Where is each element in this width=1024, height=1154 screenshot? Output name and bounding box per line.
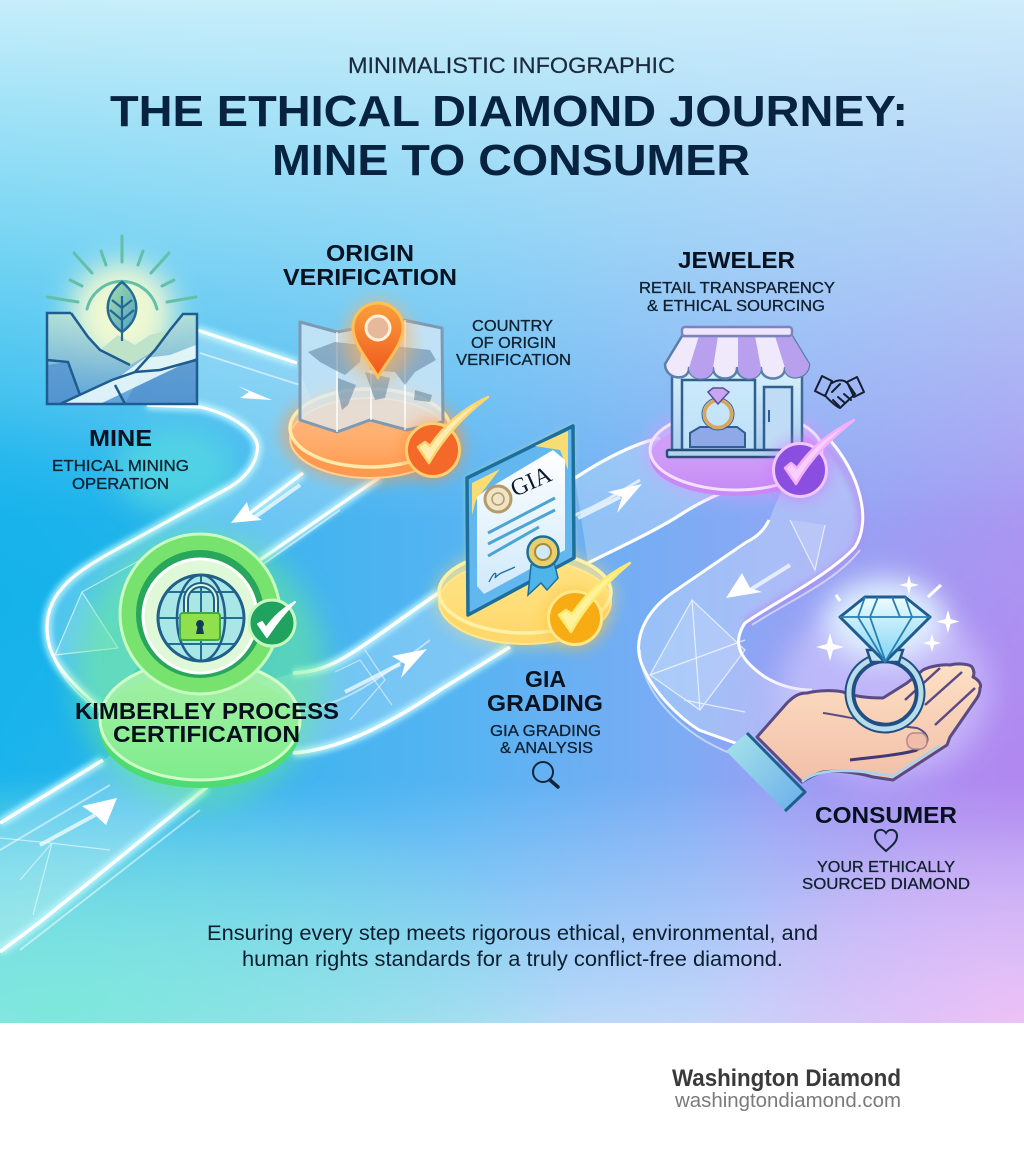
shop building [665,327,809,457]
purple check badge [770,420,854,500]
label: GIA grading [487,666,603,757]
ribbon: GIA to jeweler [575,438,745,563]
station: jeweler storefront [644,327,864,500]
main title: MINE TO CONSUMER [272,136,750,185]
label: GIA grading: GIA [525,666,566,692]
label: consumer: SOURCED DIAMOND [802,876,970,893]
ribbon: mine to origin to Kimberley [47,330,380,720]
label: jeweler [639,247,835,315]
certificate [467,426,574,615]
station: Kimberley Process badge [75,534,325,805]
diamond [840,597,930,662]
label: mine [52,425,189,493]
green check badge [249,600,295,646]
label: consumer [802,802,970,893]
translucent journey ribbon [0,330,863,952]
green glow [75,535,325,805]
label: kimberley process certification: KIMBERLEY PROCESS [75,698,339,724]
station: origin verification map [282,300,488,482]
consumer: hand holding diamond ring [726,575,990,811]
icon: mine landscape with leaf and sun [47,236,197,404]
awning [665,336,809,378]
ring in window [704,400,732,428]
main title: THE ETHICAL DIAMOND JOURNEY: [110,87,908,136]
certificate text: GIA [507,461,556,502]
direction arrows [40,386,790,845]
label: mine: MINE [89,425,152,451]
label: origin verification [283,240,571,369]
label: kimberley process certification: CERTIFICATION [113,721,300,747]
green disk [100,660,300,788]
label: consumer: CONSUMER [815,802,957,828]
closing statement: human rights standards for a truly conflict-free diamond. [242,948,783,971]
label: origin verification: COUNTRY [472,318,553,335]
icon: handshake [815,376,864,408]
label: GIA grading: GIA GRADING [490,723,601,740]
label: origin verification: VERIFICATION [283,264,457,290]
yellow check badge [545,563,630,648]
label: GIA grading: GRADING [487,690,603,716]
ribbon seal [528,558,558,595]
closing statement: Ensuring every step meets rigorous ethical, environmental, and [207,922,818,945]
orange disk [282,386,458,482]
closing statement [207,922,818,971]
footer brand [672,1065,901,1112]
map pin [344,300,412,380]
label: mine: ETHICAL MINING [52,458,189,475]
mountains [47,313,196,404]
footer band [0,1023,1024,1154]
ribbon: start to Kimberley to GIA [0,592,510,952]
leaf [108,282,136,332]
globe with padlock [158,575,244,662]
label: origin verification: VERIFICATION [456,352,571,369]
folded map [300,320,443,432]
label: jeweler: & ETHICAL SOURCING [647,298,825,315]
label: GIA grading: & ANALYSIS [500,740,593,757]
station: GIA grading certificate [435,426,630,648]
label: origin verification: OF ORIGIN [471,335,556,352]
ribbon: jeweler to consumer [639,440,863,773]
footer brand: Washington Diamond [672,1065,901,1092]
ring [849,657,921,729]
shirt cuff [726,733,805,811]
hand [757,664,981,782]
yellow disk [435,547,615,647]
icon: magnifying glass [533,762,558,787]
overline: MINIMALISTIC INFOGRAPHIC [348,53,675,78]
icon: heart [875,830,897,851]
label: origin verification: ORIGIN [326,240,414,266]
label: jeweler: JEWELER [678,247,795,273]
title block [110,53,908,185]
label: kimberley process certification [75,698,339,747]
label: jeweler: RETAIL TRANSPARENCY [639,280,835,297]
label: consumer: YOUR ETHICALLY [817,859,955,876]
purple disk [644,406,828,498]
sparkles [816,575,960,661]
label: mine: OPERATION [72,476,169,493]
ring badge [120,534,280,694]
sun rays [47,236,196,309]
footer brand: washingtondiamond.com [674,1090,901,1112]
orange check badge [403,397,488,480]
